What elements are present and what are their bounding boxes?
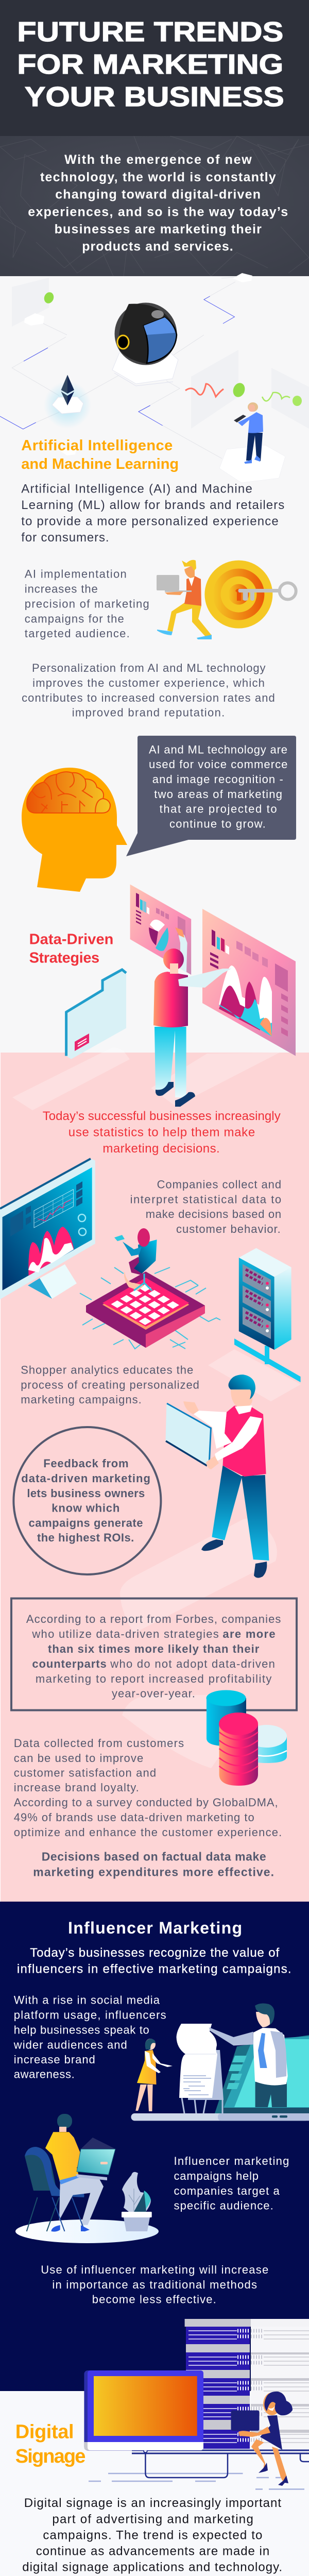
text: personalization — [22, 662, 275, 719]
panel: data-driven section background — [1, 1053, 309, 1902]
text: personalization: improved brand reputation. — [72, 706, 225, 719]
text: companies collect: Companies collect and — [157, 1178, 281, 1191]
heading: digital signage: Signage — [15, 2446, 85, 2467]
intro text: technology, the world is constantly — [40, 170, 276, 184]
text: AI implementation: campaigns for the — [25, 612, 124, 625]
text: use of influencer marketing: become less effective. — [92, 2293, 216, 2306]
title — [17, 16, 284, 112]
text: influencer campaigns: campaigns help — [174, 2170, 259, 2182]
text: influencer campaigns — [174, 2155, 289, 2212]
illustration: digital signage building and monitor — [84, 2319, 309, 2489]
callout: speech bubble: continue to grow. — [169, 818, 266, 831]
text: decisions conclusion: Decisions based on factual data make — [42, 1850, 266, 1863]
callout: Forbes box: According to a report from Forbes, companies — [26, 1613, 281, 1625]
text: AI implementation: increases the — [25, 582, 98, 595]
illustration: dashboards with man — [66, 885, 296, 1107]
callout: feedback circle: know which — [52, 1501, 119, 1515]
callout: feedback circle: lets business owners — [27, 1487, 145, 1500]
text: rise in social media: platform usage, influencers — [14, 2009, 166, 2022]
text: digital signage intro: Digital signage is an increasingly important — [24, 2496, 281, 2510]
text: influencer campaigns: specific audience. — [174, 2199, 273, 2212]
text: shopper analytics — [21, 1363, 199, 1406]
text: use of influencer marketing: Use of influencer marketing will increase — [41, 2263, 268, 2276]
text: shopper analytics: process of creating personalized — [21, 1378, 199, 1391]
monitor — [84, 2370, 228, 2478]
heading: influencer marketing: Influencer Marketing — [68, 1919, 242, 1937]
text: today's successful businesses: use statistics to help them make — [68, 1125, 255, 1139]
panel: digital signage section background — [0, 2391, 309, 2576]
dashboard panel large — [202, 909, 296, 1056]
intro text: With the emergence of new — [64, 152, 252, 167]
text: decisions conclusion — [33, 1850, 274, 1879]
callout: speech bubble: and image recognition - — [152, 773, 283, 786]
text: influencers subheading: influencers in effective marketing campaigns. — [17, 1962, 291, 1976]
callout: Forbes box: who do not adopt data-driven — [110, 1657, 275, 1670]
text: influencer campaigns: companies target a — [174, 2184, 280, 2197]
text: shopper analytics: Shopper analytics educates the — [21, 1363, 193, 1376]
text: rise in social media: With a rise in social media — [14, 1994, 160, 2007]
callout: speech bubble — [126, 736, 296, 856]
callout: feedback circle: campaigns generate — [29, 1517, 143, 1529]
text: rise in social media: wider audiences and — [13, 2038, 127, 2051]
heading: data-driven strategies: Data-Driven — [29, 931, 113, 948]
text: companies collect — [130, 1178, 281, 1235]
robot ball on hex — [112, 303, 178, 386]
building backdrop — [185, 2319, 309, 2449]
title: FUTURE TRENDS — [17, 16, 283, 47]
text: data collected: customer satisfaction and — [14, 1766, 156, 1780]
heading: digital signage — [15, 2421, 85, 2467]
text: AI implementation: AI implementation — [25, 567, 127, 580]
intro text — [28, 152, 288, 254]
man presenting — [209, 2004, 288, 2107]
callout: speech bubble: AI and ML technology are — [149, 743, 287, 756]
callout: Forbes box: who utilize data-driven strategies — [31, 1628, 219, 1640]
callout: Forbes box — [11, 1598, 297, 1710]
woman carrying folder — [231, 2392, 293, 2486]
text: data collected — [14, 1737, 282, 1839]
light blue card — [66, 970, 126, 1059]
callout: feedback circle — [13, 1427, 161, 1574]
text: today's successful businesses — [43, 1109, 281, 1156]
panel: AI section background — [0, 276, 309, 1053]
illustration: man with laptop — [166, 1375, 269, 1578]
text: rise in social media: help businesses speak to — [14, 2024, 149, 2037]
text: today's successful businesses: marketing decisions. — [102, 1142, 220, 1156]
callout: speech bubble: two areas of marketing — [154, 788, 282, 801]
illustration: isometric AI network — [0, 273, 309, 483]
text: influencer campaigns: Influencer marketing — [174, 2155, 289, 2167]
callout: Forbes box: are more — [222, 1628, 276, 1640]
heading: digital signage: Digital — [15, 2421, 74, 2443]
callout: Forbes box: year-over-year. — [112, 1687, 195, 1700]
text: companies collect: make decisions based on — [146, 1208, 281, 1221]
title: YOUR BUSINESS — [25, 81, 284, 112]
text: AI intro: to provide a more personalized experience — [21, 515, 279, 529]
man with tablet on hex — [219, 402, 285, 483]
text: digital signage intro: part of advertising and marketing — [52, 2512, 253, 2526]
text: companies collect: customer behavior. — [176, 1223, 281, 1235]
text: data collected: increase brand loyalty. — [14, 1781, 139, 1794]
callout: Forbes box: counterparts — [32, 1657, 107, 1670]
panel: title background — [0, 0, 309, 136]
illustration: presentation on laptop — [131, 2004, 309, 2121]
callout: feedback circle: the highest ROIs. — [37, 1531, 134, 1544]
text: data collected: can be used to improve — [14, 1752, 143, 1765]
heading: AI and machine learning: Artificial Intelligence — [21, 437, 173, 454]
callout: feedback circle: Feedback from — [43, 1457, 129, 1470]
callout: speech bubble: used for voice commerce — [149, 758, 287, 771]
floor lines — [89, 2473, 304, 2489]
text: rise in social media: awareness. — [14, 2068, 75, 2080]
squiggles and check marks — [185, 381, 302, 406]
callout: Forbes box: marketing to report increased profitability — [36, 1672, 271, 1685]
text: shopper analytics: marketing campaigns. — [21, 1393, 142, 1406]
text: influencers subheading — [17, 1946, 291, 1976]
text: AI implementation: targeted audience. — [25, 627, 130, 640]
text: digital signage intro: campaigns. The trend is expected to — [43, 2528, 262, 2542]
text: personalization: improves the customer experience, which — [32, 676, 265, 689]
text: personalization: contributes to increased conversion rates and — [22, 691, 275, 704]
illustration: monitor with charts — [0, 1159, 95, 1299]
illustration: man with key and target — [157, 560, 296, 639]
text: AI implementation — [25, 567, 149, 640]
text: data collected: 49% of brands use data-driven marketing to — [14, 1811, 254, 1824]
heading: AI and machine learning — [21, 437, 179, 472]
text: AI intro: Learning (ML) allow for brands and retailers — [21, 498, 284, 512]
illustration: woman on chip — [80, 1228, 220, 1349]
icon: check badge — [43, 291, 55, 304]
text: use of influencer marketing: in importance as traditional methods — [52, 2278, 257, 2291]
man pointing at dashboards — [153, 927, 232, 1107]
text: decisions conclusion: marketing expenditures more effective. — [33, 1866, 274, 1879]
text: personalization: Personalization from AI and ML technology — [32, 662, 266, 674]
icon: head with brain — [22, 768, 127, 892]
text: AI implementation: precision of marketing — [25, 597, 149, 610]
intro text: changing toward digital-driven — [55, 188, 261, 202]
text: digital signage intro — [22, 2496, 282, 2574]
text: use of influencer marketing — [41, 2263, 268, 2306]
text: rise in social media: increase brand — [14, 2053, 95, 2066]
illustration: server rack — [234, 1248, 301, 1382]
callout: Forbes box: than six times more likely than their — [48, 1642, 260, 1655]
text: AI intro: Artificial Intelligence (AI) and Machine — [21, 482, 252, 496]
flipchart — [176, 2024, 224, 2113]
ethereum diamond on hex — [44, 375, 91, 429]
text: influencers subheading: Today’s businesses recognize the value of — [30, 1946, 280, 1960]
panel: influencer section background — [0, 1902, 309, 2391]
text: data collected: According to a survey conducted by GlobalDMA, — [14, 1796, 278, 1809]
illustration: man at laptop on chair — [15, 2114, 159, 2243]
text: today's successful businesses: Today’s successful businesses increasingly — [43, 1109, 281, 1123]
intro text: businesses are marketing their — [55, 222, 262, 236]
heading: AI and machine learning: and Machine Learning — [21, 456, 179, 472]
callout: feedback circle: data-driven marketing — [21, 1472, 150, 1485]
intro text: products and services. — [82, 240, 233, 254]
text: data collected: Data collected from customers — [14, 1737, 184, 1750]
dashboard panel small — [130, 885, 191, 975]
heading: data-driven strategies — [29, 931, 113, 967]
text: companies collect: interpret statistical data to — [130, 1193, 281, 1206]
text: data collected: optimize and enhance the customer experience. — [14, 1826, 282, 1839]
text: AI intro: for consumers. — [21, 531, 109, 545]
intro text: experiences, and so is the way today’s — [28, 205, 288, 219]
heading: data-driven strategies: Strategies — [29, 950, 99, 967]
panel: intro background — [0, 136, 309, 276]
title: FOR MARKETING — [17, 49, 283, 80]
text: rise in social media — [13, 1994, 166, 2080]
woman in yellow dress — [135, 2039, 173, 2111]
callout: speech bubble: that are projected to — [160, 803, 277, 816]
text: AI intro — [21, 482, 284, 545]
icon: database cylinders — [206, 1690, 287, 1786]
text: digital signage intro: continue as advancements are made in — [36, 2544, 269, 2558]
text: digital signage intro: digital signage applications and technology. — [22, 2561, 282, 2574]
